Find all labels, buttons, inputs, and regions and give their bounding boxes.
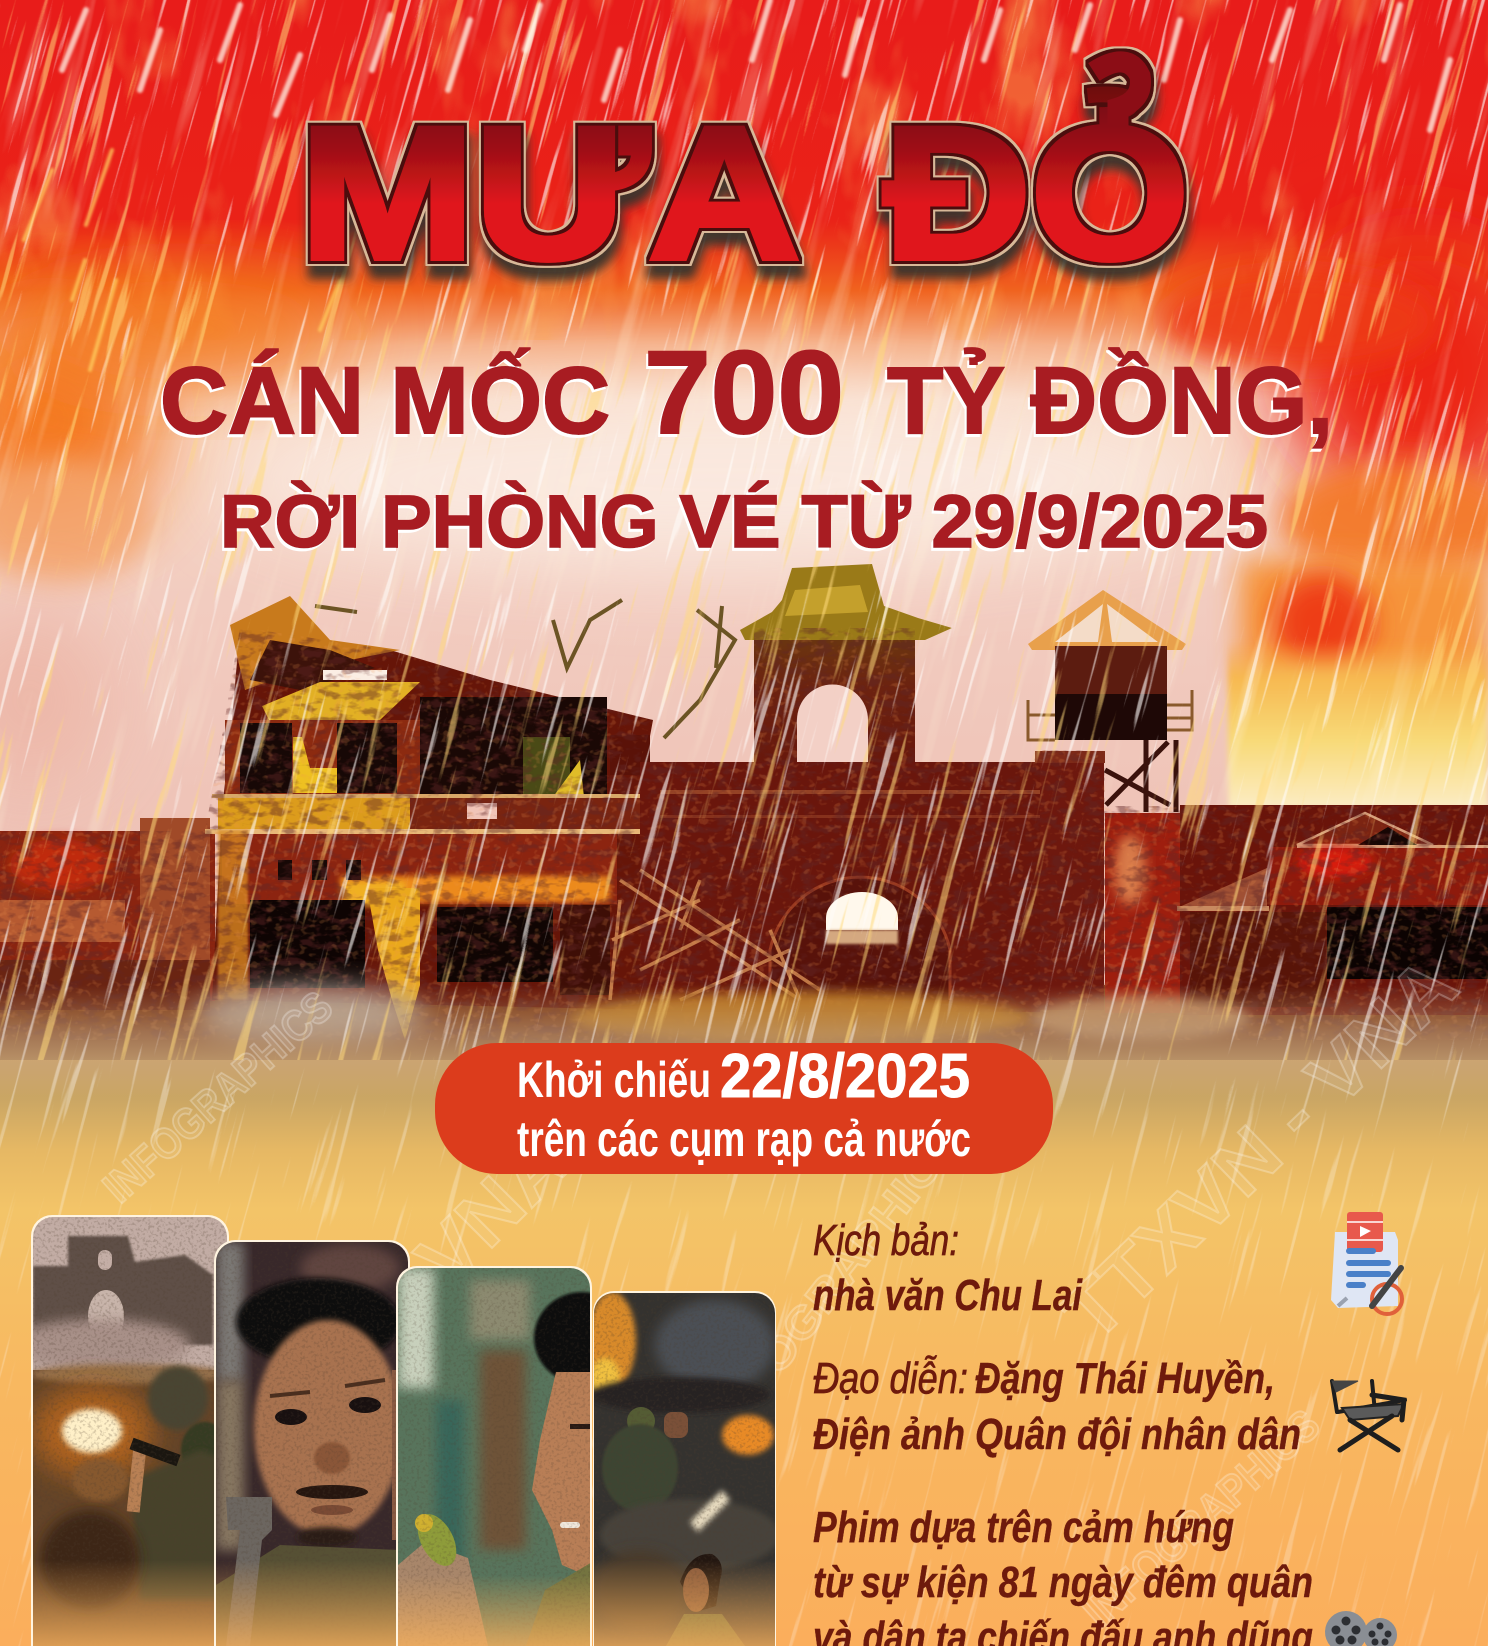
watermarks: INFOGRAPHICS (699, 1117, 972, 1446)
gold lower panel fade (0, 985, 1488, 1646)
photo card 3: soldier with bird (396, 1266, 592, 1646)
left low building (0, 818, 215, 1010)
central tower (740, 564, 952, 762)
ground rubble (195, 985, 1250, 1045)
headline: leaves box office date: RỜI PHÒNG VÉ TỪ 29/9/2025 (220, 480, 1268, 563)
ground base under the buildings (0, 985, 1488, 1060)
icon: director chair (1332, 1381, 1405, 1450)
credit: director: Đạo diễn: (813, 1354, 968, 1403)
credit: director (813, 1354, 1301, 1459)
gate arch light (826, 892, 898, 944)
photo card 4: battlefield (588, 1291, 780, 1646)
icon: script document (1331, 1212, 1402, 1314)
scaffolding debris (315, 600, 820, 1000)
background: red rain sky and golden lower panel (0, 0, 1488, 1000)
release date pill: 22/8/2025 (720, 1042, 970, 1111)
building texture (0, 628, 1488, 1040)
credit: director: Đặng Thái Huyền, (975, 1354, 1275, 1403)
watermarks: TTXVN - VNA (155, 1117, 585, 1547)
photo card 2: soldier portrait (214, 1240, 410, 1646)
tower arch opening (797, 684, 868, 762)
main title: MƯA ĐỎ: ĐỎ (884, 88, 1189, 298)
central gate wall (640, 762, 1040, 1012)
headline: 700 billion milestone: 700 (644, 327, 844, 459)
headline: 700 billion milestone (160, 327, 1333, 459)
watch tower (1028, 590, 1192, 1010)
credit: director: Điện ảnh Quân đội nhân dân (813, 1410, 1301, 1459)
credit: screenplay (813, 1216, 1083, 1320)
right building (1105, 805, 1488, 1015)
icon: film reels (1325, 1611, 1397, 1646)
release date pill: Khởi chiếu (517, 1052, 711, 1108)
headline: 700 billion milestone: CÁN MỐC (160, 348, 610, 454)
watermarks: INFOGRAPHICS (1074, 1400, 1330, 1637)
release date pill (435, 1042, 1053, 1174)
release date pill: trên các cụm rạp cả nước (517, 1111, 971, 1167)
watermarks: INFOGRAPHICS (94, 982, 342, 1212)
headline: 700 billion milestone: TỶ ĐỒNG, (887, 348, 1333, 454)
credit: screenplay: Kịch bản: (813, 1216, 959, 1265)
main title: MƯA ĐỎ: MƯA (300, 88, 800, 298)
main title: MƯA ĐỎ (300, 62, 1189, 298)
illustration: ruined citadel (0, 564, 1488, 1338)
watermarks: TTXVN - VNA (1046, 940, 1474, 1357)
collapsed left building (205, 596, 660, 1040)
description: film inspiration: từ sự kiện 81 ngày đêm quân (813, 1558, 1313, 1607)
description: film inspiration (813, 1503, 1313, 1646)
credit: screenplay: nhà văn Chu Lai (813, 1271, 1083, 1320)
photo card 1: gun flash at the citadel (10, 1215, 230, 1646)
watermarks (94, 940, 1474, 1637)
description: film inspiration: Phim dựa trên cảm hứng (813, 1503, 1234, 1552)
